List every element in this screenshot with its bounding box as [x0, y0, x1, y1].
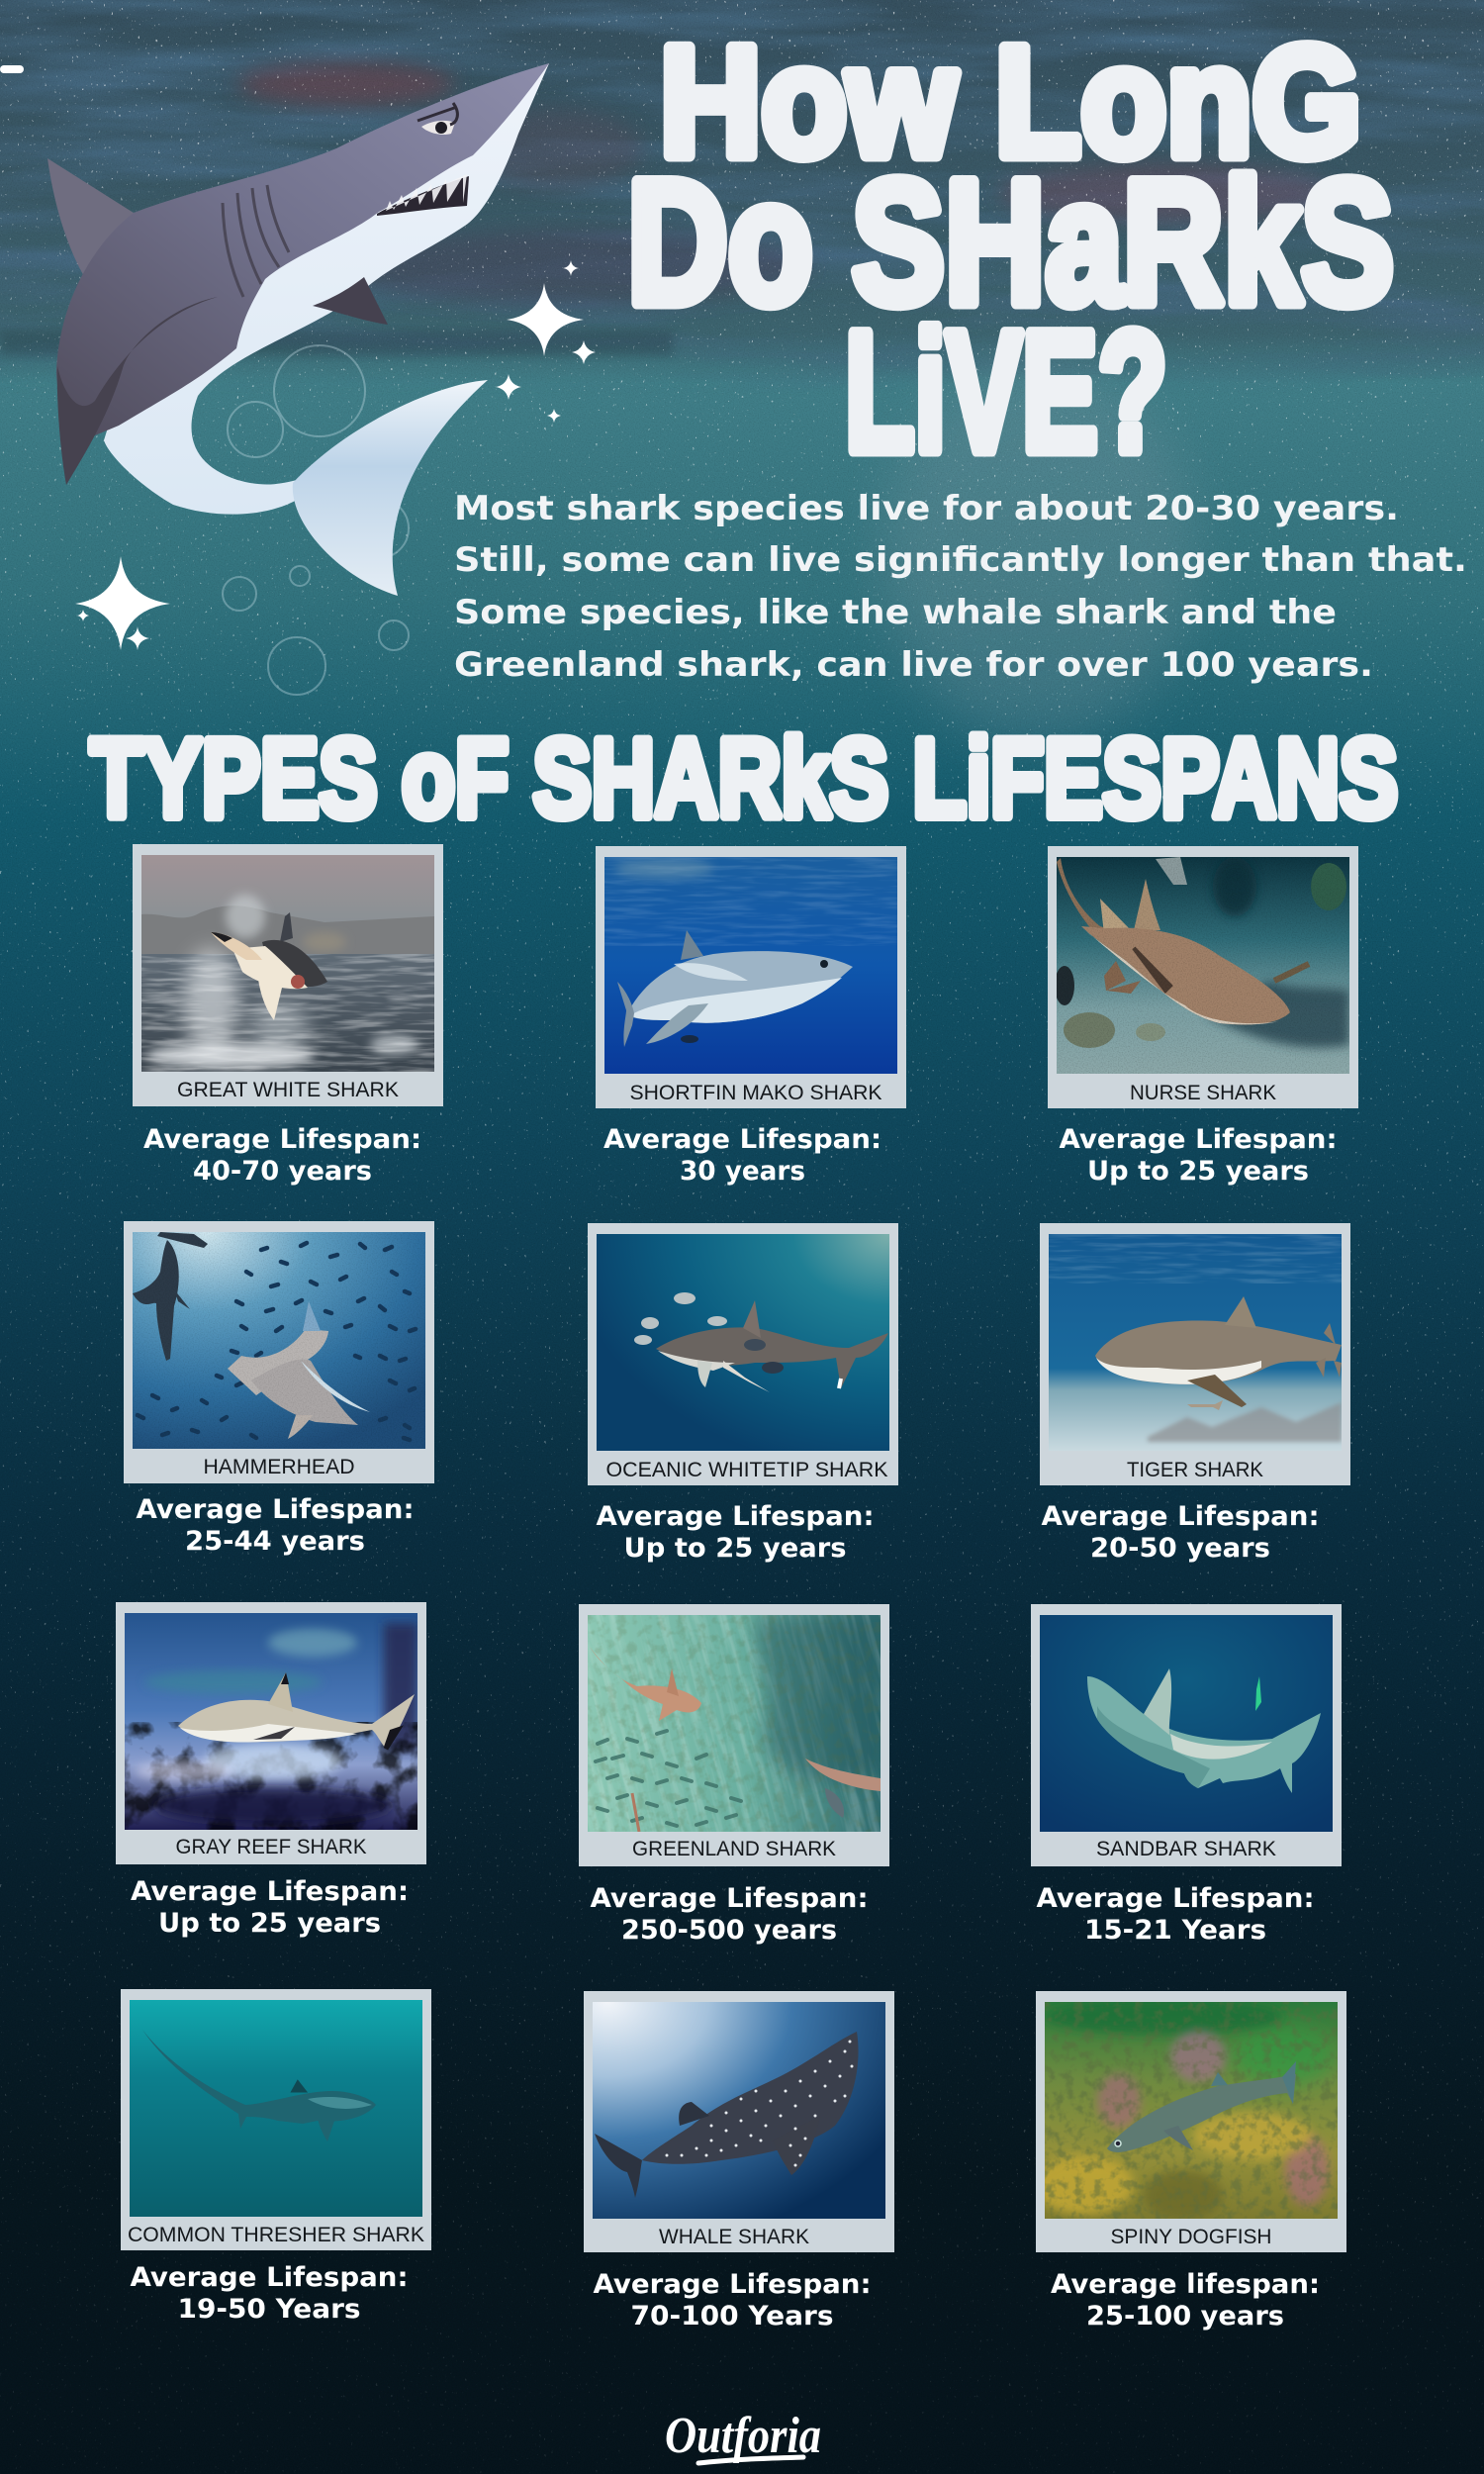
lifespan: nurse shark: Average Lifespan:: [1059, 1124, 1338, 1155]
lifespan: hammerhead: Average Lifespan:: [137, 1494, 414, 1525]
card: greenland shark: [579, 1604, 889, 1866]
lifespan: oceanic whitetip shark: [596, 1501, 875, 1564]
card: nurse shark: [1048, 846, 1358, 1108]
lifespan: whale shark: [594, 2269, 871, 2331]
lifespan: great white shark: Average Lifespan:: [143, 1124, 421, 1155]
card: greenland shark: GREENLAND SHARK: [632, 1838, 836, 1860]
lifespan: great white shark: [143, 1124, 421, 1187]
lifespan: nurse shark: Up to 25 years: [1087, 1156, 1309, 1187]
lifespan: shortfin mako shark: Average Lifespan:: [603, 1124, 881, 1155]
card: great white shark: [133, 844, 443, 1106]
card: common thresher shark: [121, 1989, 431, 2250]
lifespan: spiny dogfish: [1051, 2269, 1320, 2331]
lifespan: gray reef shark: Average Lifespan:: [131, 1876, 409, 1907]
logo: Outforia: Outforia: [665, 2408, 821, 2464]
card: whale shark: [584, 1991, 894, 2252]
card: spiny dogfish: SPINY DOGFISH: [1110, 2226, 1272, 2248]
lifespan: tiger shark: [1041, 1501, 1320, 1564]
card: tiger shark: [1040, 1223, 1350, 1485]
lifespan: tiger shark: 20-50 years: [1090, 1533, 1270, 1564]
lifespan: common thresher shark: [131, 2262, 408, 2325]
card: sandbar shark: [1031, 1604, 1342, 1866]
card: tiger shark: TIGER SHARK: [1127, 1459, 1263, 1481]
lifespan: sandbar shark: Average Lifespan:: [1037, 1883, 1314, 1914]
title: [627, 15, 1394, 487]
card: oceanic whitetip shark: [588, 1223, 898, 1485]
card: oceanic whitetip shark: OCEANIC WHITETIP SHARK: [605, 1459, 888, 1481]
card: nurse shark: NURSE SHARK: [1130, 1082, 1276, 1104]
card: great white shark: GREAT WHITE SHARK: [177, 1079, 399, 1101]
card: hammerhead: [124, 1221, 434, 1483]
lifespan: gray reef shark: [131, 1876, 409, 1939]
card: hammerhead: HAMMERHEAD: [204, 1456, 354, 1478]
lifespan: greenland shark: 250-500 years: [621, 1915, 837, 1946]
lifespan: sandbar shark: [1037, 1883, 1314, 1946]
card: common thresher shark: COMMON THRESHER SHARK: [128, 2224, 424, 2246]
card: gray reef shark: GRAY REEF SHARK: [176, 1836, 366, 1858]
bubbles: [223, 345, 409, 695]
intro paragraph: Some species, like the whale shark and the: [454, 593, 1337, 632]
illustration: leaping shark: [47, 63, 549, 596]
lifespan: greenland shark: Average Lifespan:: [590, 1883, 869, 1914]
sparkles: [75, 260, 596, 650]
lifespan: shortfin mako shark: [603, 1124, 881, 1187]
card: shortfin mako shark: SHORTFIN MAKO SHARK: [629, 1082, 882, 1104]
intro paragraph: Most shark species live for about 20-30 years.: [454, 489, 1399, 528]
lifespan: hammerhead: 25-44 years: [185, 1526, 365, 1557]
lifespan: common thresher shark: 19-50 Years: [178, 2294, 360, 2325]
lifespan: great white shark: 40-70 years: [193, 1156, 372, 1187]
title: How LonG: [660, 15, 1361, 189]
lifespan: nurse shark: [1059, 1124, 1338, 1187]
lifespan: gray reef shark: Up to 25 years: [158, 1908, 381, 1939]
lifespan: whale shark: Average Lifespan:: [594, 2269, 871, 2300]
intro paragraph: Still, some can live significantly longer than that.: [454, 540, 1467, 580]
pilot fish: [634, 1292, 784, 1374]
lifespan: common thresher shark: Average Lifespan:: [131, 2262, 408, 2293]
card: whale shark: WHALE SHARK: [659, 2226, 809, 2248]
lifespan: sandbar shark: 15-21 Years: [1084, 1915, 1266, 1946]
card: sandbar shark: SANDBAR SHARK: [1096, 1838, 1276, 1860]
card: gray reef shark: [116, 1602, 426, 1864]
lifespan: tiger shark: Average Lifespan:: [1041, 1501, 1320, 1532]
card: shortfin mako shark: [596, 846, 906, 1108]
card: spiny dogfish: [1035, 1991, 1346, 2252]
lifespan: shortfin mako shark: 30 years: [680, 1156, 805, 1187]
lifespan: hammerhead: [137, 1494, 414, 1557]
intro paragraph: Greenland shark, can live for over 100 years.: [454, 645, 1373, 685]
lifespan: oceanic whitetip shark: Up to 25 years: [623, 1533, 847, 1564]
title: LiVE?: [845, 297, 1167, 487]
lifespan: spiny dogfish: 25-100 years: [1086, 2301, 1284, 2331]
lifespan: greenland shark: [590, 1883, 869, 1946]
lifespan: spiny dogfish: Average lifespan:: [1051, 2269, 1320, 2300]
lifespan: whale shark: 70-100 Years: [631, 2301, 833, 2331]
intro paragraph: [454, 489, 1467, 685]
lifespan: oceanic whitetip shark: Average Lifespan:: [596, 1501, 875, 1532]
